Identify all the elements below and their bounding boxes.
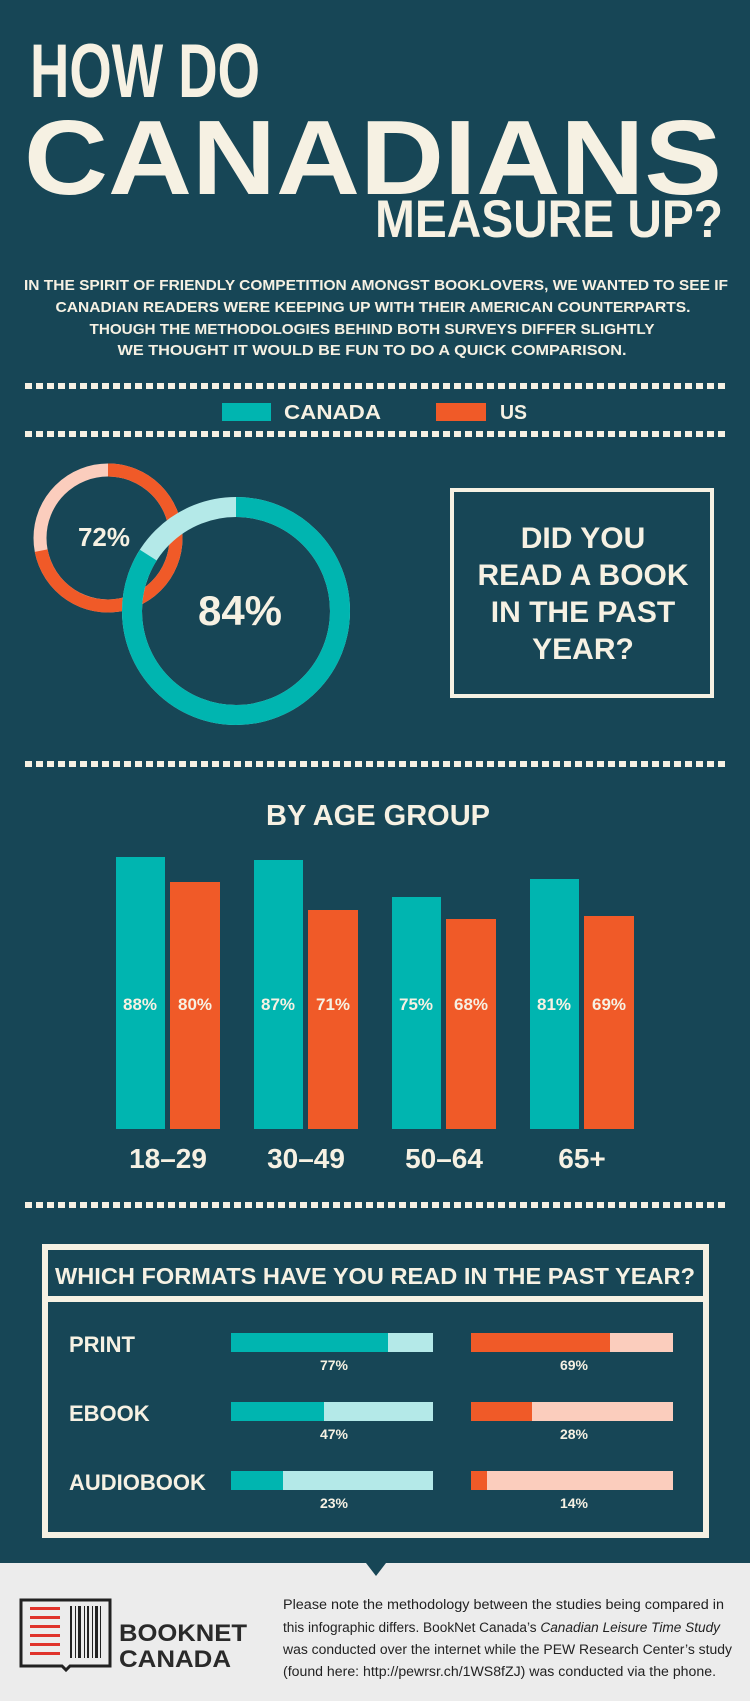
- panel: formats: 14%: [560, 1495, 589, 1511]
- bar chart: age groups: [116, 857, 634, 1174]
- title: MEASURE UP?: [375, 190, 723, 249]
- panel: formats: PRINT: [69, 1332, 136, 1357]
- bar chart: age groups: 68%: [454, 995, 488, 1014]
- question box: DID YOU: [521, 522, 645, 555]
- intro paragraph: CANADIAN READERS WERE KEEPING UP WITH THEIR AMERICAN COUNTERPARTS.: [56, 299, 690, 316]
- question box: YEAR?: [532, 633, 634, 666]
- footnote: this infographic differs. BookNet Canada’s Canadian Leisure Time Study: [283, 1620, 721, 1635]
- bar chart: age groups: 87%: [261, 995, 295, 1014]
- question box: READ A BOOK: [477, 559, 689, 592]
- panel: formats: 69%: [560, 1357, 589, 1373]
- panel: formats: [45, 1247, 706, 1535]
- panel: formats: 23%: [320, 1495, 349, 1511]
- bar chart: age groups: 18–29: [129, 1143, 207, 1174]
- logo: booknet canada: [21, 1600, 247, 1673]
- legend: US: [500, 402, 527, 424]
- intro paragraph: WE THOUGHT IT WOULD BE FUN TO DO A QUICK COMPARISON.: [118, 342, 626, 359]
- legend: [222, 402, 527, 424]
- footnote: (found here: http://pewrsr.ch/1WS8fZJ) was conducted via the phone.: [283, 1664, 716, 1679]
- bar chart: age groups: 71%: [316, 995, 350, 1014]
- logo: booknet canada: CANADA: [119, 1646, 231, 1673]
- bar chart: age groups: 80%: [178, 995, 212, 1014]
- title: CANADIANS: [24, 99, 722, 217]
- panel: formats: EBOOK: [69, 1401, 150, 1426]
- footer: [0, 1563, 750, 1701]
- panel: formats: 77%: [320, 1357, 349, 1373]
- title: [24, 29, 723, 249]
- panel: formats: WHICH FORMATS HAVE YOU READ IN THE PAST YEAR?: [55, 1263, 695, 1289]
- intro paragraph: IN THE SPIRIT OF FRIENDLY COMPETITION AMONGST BOOKLOVERS, WE WANTED TO SEE IF: [24, 277, 728, 294]
- question box: [452, 490, 712, 696]
- donut: Canada 84%: [132, 507, 340, 715]
- heading: by age group: BY AGE GROUP: [266, 800, 490, 832]
- intro paragraph: THOUGH THE METHODOLOGIES BEHIND BOTH SURVEYS DIFFER SLIGHTLY: [90, 321, 654, 338]
- panel: formats: AUDIOBOOK: [69, 1470, 206, 1495]
- donut: US 72%: 72%: [78, 522, 130, 552]
- footnote: was conducted over the internet while the PEW Research Center’s study: [282, 1642, 732, 1657]
- bar chart: age groups: 88%: [123, 995, 157, 1014]
- legend: CANADA: [284, 402, 381, 424]
- bar chart: age groups: 65+: [558, 1143, 606, 1174]
- donut: US 72%: [40, 470, 176, 606]
- question box: IN THE PAST: [491, 596, 675, 629]
- bar chart: age groups: 50–64: [405, 1143, 483, 1174]
- panel: formats: 47%: [320, 1426, 349, 1442]
- footnote: [282, 1597, 732, 1679]
- intro paragraph: [24, 277, 728, 359]
- donut: Canada 84%: 84%: [198, 587, 282, 634]
- panel: formats: 28%: [560, 1426, 589, 1442]
- bar chart: age groups: 69%: [592, 995, 626, 1014]
- bar chart: age groups: 81%: [537, 995, 571, 1014]
- logo: booknet canada: BOOKNET: [119, 1620, 247, 1647]
- bar chart: age groups: 75%: [399, 995, 433, 1014]
- title: HOW DO: [30, 29, 260, 114]
- footnote: Please note the methodology between the studies being compared in: [283, 1597, 724, 1612]
- bar chart: age groups: 30–49: [267, 1143, 345, 1174]
